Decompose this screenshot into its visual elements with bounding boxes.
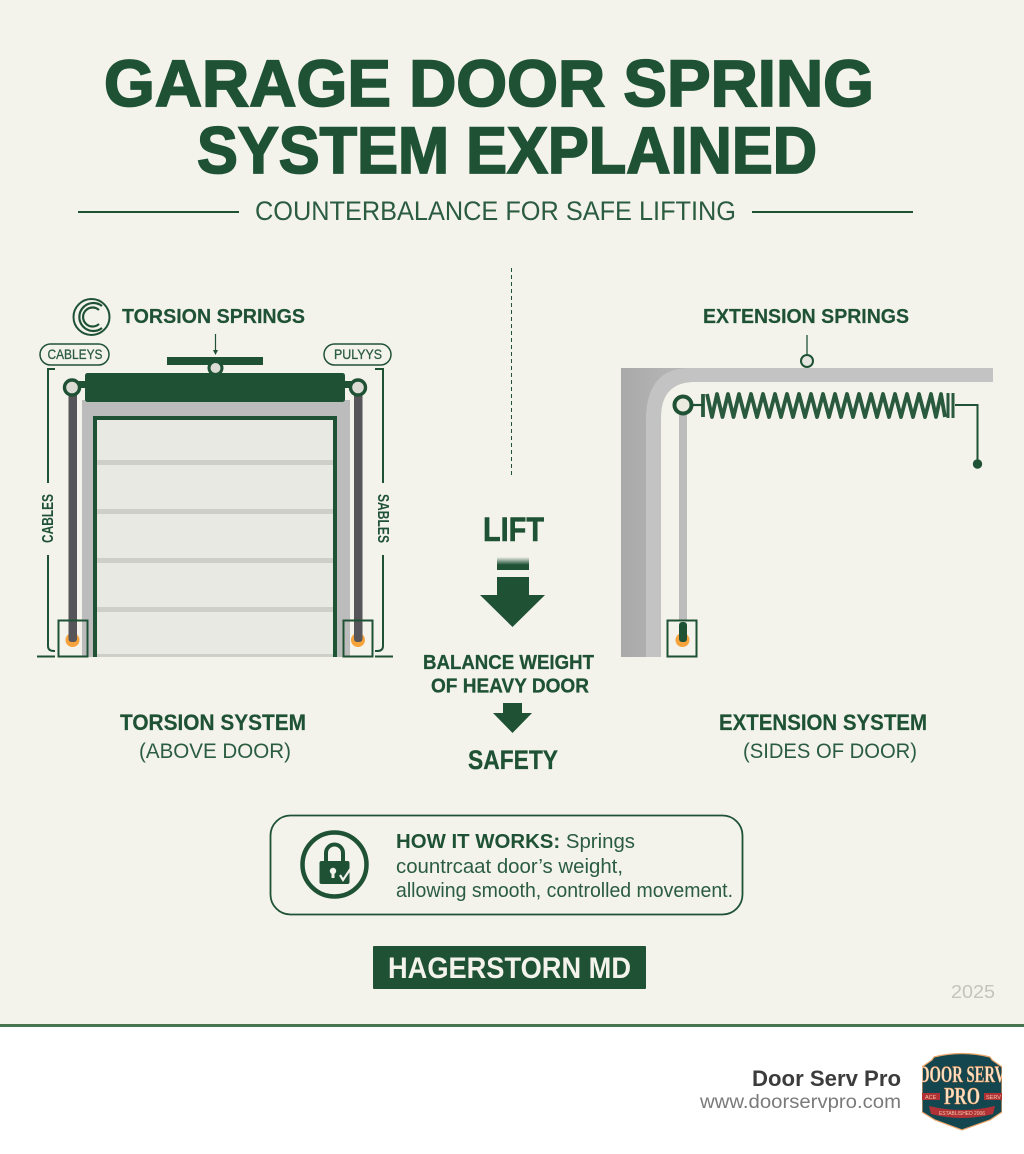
balance arrow xyxy=(493,703,532,733)
center bearing xyxy=(209,362,222,374)
extension spring coil xyxy=(703,393,953,418)
left cable xyxy=(68,392,77,642)
torsion spring arrow xyxy=(213,334,218,355)
balance text xyxy=(423,652,594,698)
footer brand text: www.doorservpro.com xyxy=(699,1092,901,1113)
left floor bracket xyxy=(58,620,88,656)
footer brand text: Door Serv Pro xyxy=(752,1066,901,1091)
location badge: HAGERSTORN MD xyxy=(388,952,631,985)
center dashed divider xyxy=(510,268,512,476)
panel: torsion system diagram xyxy=(37,299,393,657)
right pulley xyxy=(343,380,366,395)
footer logo: PRO xyxy=(944,1084,980,1110)
callout text: allowing smooth, controlled movement. xyxy=(396,880,733,902)
footer brand text xyxy=(699,1066,901,1113)
label: cableys pill xyxy=(40,344,109,365)
title: GARAGE DOOR SPRING xyxy=(104,46,874,120)
right bracket xyxy=(375,369,393,656)
label: sables right: SABLES xyxy=(374,494,391,543)
balance text: OF HEAVY DOOR xyxy=(431,676,590,698)
subtitle with rules: COUNTERBALANCE FOR SAFE LIFTING xyxy=(255,196,736,226)
footer logo xyxy=(919,1054,1005,1130)
caption: torsion system xyxy=(120,710,306,763)
panel: extension system diagram xyxy=(621,306,993,657)
callout text xyxy=(396,831,733,902)
overhead track xyxy=(621,368,993,657)
label: cableys pill: CABLEYS xyxy=(48,347,102,362)
lift label: LIFT xyxy=(483,511,544,549)
left pulley xyxy=(64,380,88,395)
left bracket xyxy=(37,369,55,656)
caption: extension system: (SIDES OF DOOR) xyxy=(743,739,917,763)
caption: torsion system: TORSION SYSTEM xyxy=(120,710,306,735)
label: pulyys pill xyxy=(324,344,391,365)
footer logo: SERV xyxy=(986,1095,1001,1101)
safety label: SAFETY xyxy=(468,745,558,775)
torsion shaft plate xyxy=(167,357,263,365)
center flow: lift, balance, safety xyxy=(423,511,594,775)
torsion spring bar xyxy=(85,373,345,402)
lift arrow xyxy=(480,577,545,627)
callout: how it works xyxy=(270,816,742,914)
door frame xyxy=(82,400,350,657)
title xyxy=(104,46,874,187)
label: extension springs: EXTENSION SPRINGS xyxy=(703,306,909,328)
indicator pin xyxy=(801,335,813,367)
icon: padlock with check xyxy=(302,832,366,896)
spring pulley xyxy=(674,396,704,414)
label: torsion springs: TORSION SPRINGS xyxy=(122,306,305,328)
year: 2025 xyxy=(951,982,995,1002)
callout text: HOW IT WORKS: Springs xyxy=(396,831,635,853)
caption: extension system: EXTENSION SYSTEM xyxy=(719,710,927,735)
icon: torsion spring coil xyxy=(74,299,110,335)
vertical cable xyxy=(679,415,687,620)
spring hook and anchor xyxy=(955,405,982,469)
caption: extension system xyxy=(719,710,927,763)
garage door xyxy=(95,418,335,657)
caption: torsion system: (ABOVE DOOR) xyxy=(139,739,291,763)
footer logo: ESTABLISHED 2006 xyxy=(939,1111,985,1117)
right cable xyxy=(354,392,362,642)
callout text: countrcaat door’s weight, xyxy=(396,856,623,878)
floor bracket xyxy=(668,620,696,656)
footer logo: ACE xyxy=(925,1095,937,1101)
title: SYSTEM EXPLAINED xyxy=(197,113,817,187)
label: cables left: CABLES xyxy=(40,494,57,543)
balance text: BALANCE WEIGHT xyxy=(423,652,594,674)
lift fading bar xyxy=(497,557,529,570)
right floor bracket xyxy=(344,620,372,656)
label: pulyys pill: PULYYS xyxy=(334,347,382,362)
